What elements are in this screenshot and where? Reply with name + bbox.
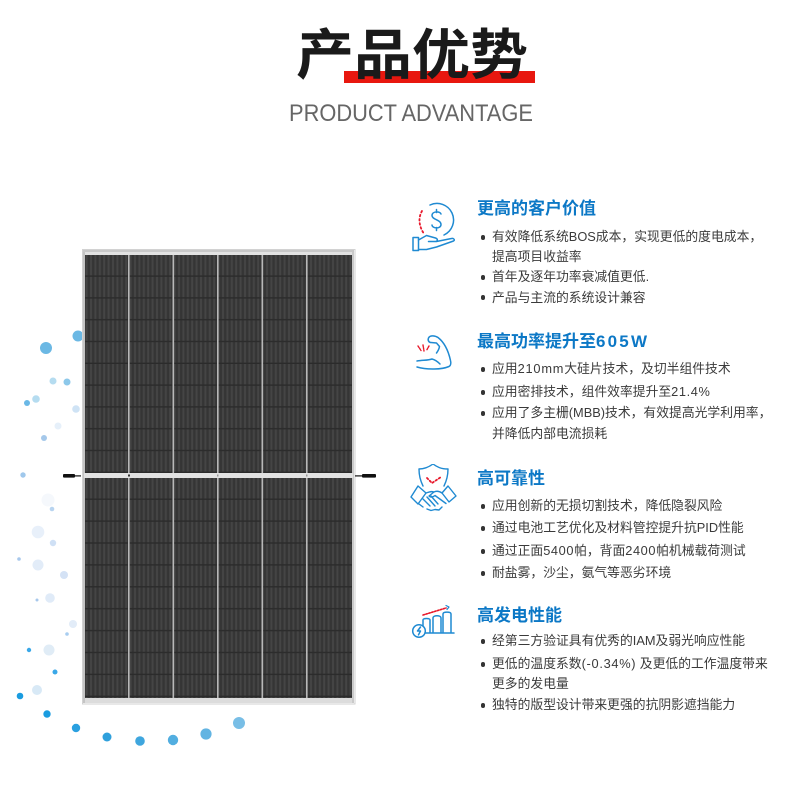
- bullet list: 产品与主流的系统设计兼容: [492, 290, 646, 305]
- bullet list: 更多的发电量: [492, 676, 569, 691]
- centre junction band: [84, 473, 353, 478]
- bullet list: 经第三方验证具有优秀的IAM及弱光响应性能: [492, 633, 745, 648]
- bullet list: [481, 498, 746, 580]
- heading: 最高功率提升至605W: [477, 332, 649, 351]
- panel: high reliability: [410, 464, 746, 580]
- lower cell block: [85, 478, 352, 698]
- icon: energy bar chart: [412, 604, 455, 638]
- icon: hand holding coin: [412, 202, 456, 252]
- title red bar: [344, 71, 535, 83]
- panel: high yield: [412, 604, 768, 712]
- bullet list: [481, 229, 762, 305]
- upper cell block: [85, 255, 352, 473]
- bullet list: 并降低内部电流损耗: [492, 426, 607, 441]
- bullet list: [481, 633, 768, 712]
- bullet list: 更低的温度系数(-0.34%) 及更低的工作温度带来: [492, 656, 768, 671]
- heading: 高发电性能: [477, 606, 562, 625]
- bullet list: 通过电池工艺优化及材料管控提升抗PID性能: [492, 520, 744, 535]
- title text: 产品优势: [296, 25, 528, 86]
- icon: shield and handshake: [410, 464, 457, 512]
- decorative bubble arc: [16, 330, 245, 746]
- title: [289, 25, 535, 127]
- left connector: [63, 474, 81, 478]
- panel: peak power: [416, 332, 771, 441]
- right connector: [355, 474, 376, 478]
- bullet list: [481, 361, 771, 441]
- bullet list: 首年及逐年功率衰减值更低.: [492, 269, 649, 284]
- bullet list: 应用了多主栅(MBB)技术，有效提高光学利用率，: [492, 405, 771, 420]
- heading: 更高的客户价值: [477, 199, 596, 218]
- bullet list: 独特的版型设计带来更强的抗阴影遮挡能力: [492, 697, 735, 712]
- bullet list: 通过正面5400帕，背面2400帕机械载荷测试: [492, 543, 746, 558]
- panel frame: [82, 250, 355, 704]
- bullet list: 应用创新的无损切割技术，降低隐裂风险: [492, 498, 722, 513]
- solar panel: [63, 249, 376, 704]
- column separators: [128, 255, 308, 698]
- bullet list: 应用210mm大硅片技术，及切半组件技术: [492, 361, 731, 376]
- bullet list: 应用密排技术，组件效率提升至21.4%: [492, 384, 710, 399]
- bullet list: 耐盐雾，沙尘，氨气等恶劣环境: [492, 565, 671, 580]
- bullet list: 提高项目收益率: [492, 249, 582, 264]
- heading: 高可靠性: [477, 469, 545, 488]
- icon: flexed arm: [416, 335, 452, 370]
- subtitle: PRODUCT ADVANTAGE: [289, 100, 533, 127]
- bullet list: 有效降低系统BOS成本，实现更低的度电成本，: [492, 229, 762, 244]
- panel: customer value: [412, 199, 762, 305]
